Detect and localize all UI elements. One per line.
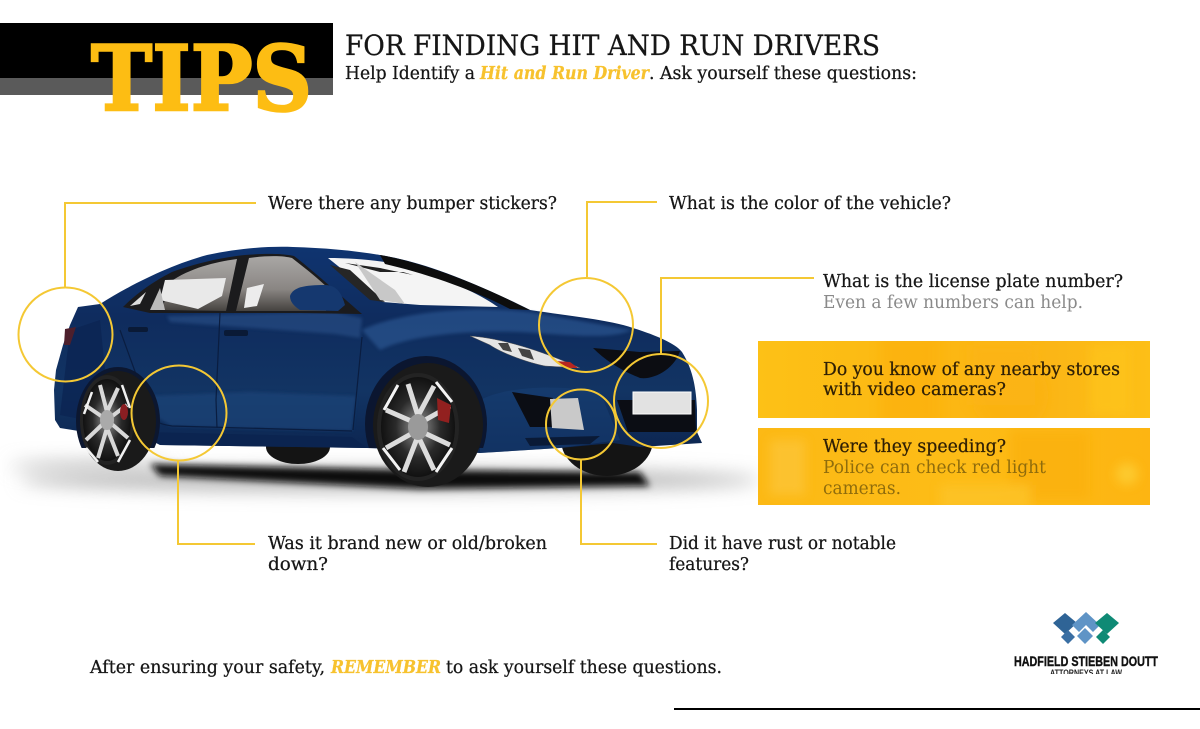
panel: speeding: Police can check red light (823, 458, 1046, 478)
logo mark (1053, 612, 1119, 644)
far wheels (266, 404, 653, 476)
label: vehicle age: down? (268, 555, 328, 575)
panel: video cameras: with video cameras? (823, 380, 1006, 400)
car body (54, 247, 702, 453)
callout: colour (539, 202, 657, 372)
fog lamp (550, 398, 584, 430)
panel: video cameras (758, 341, 1150, 418)
header banner (0, 23, 333, 95)
subheading: Hit and Run Driver (479, 64, 651, 84)
panel: video cameras: Do you know of any nearby stores (823, 360, 1120, 380)
windshield (328, 255, 530, 310)
panel: speeding: Were they speeding? (823, 437, 1006, 457)
label: licence plate: What is the license plate number? (823, 272, 1123, 292)
footer reminder: REMEMBER (330, 658, 441, 678)
headlight (470, 336, 580, 368)
bumper intake (512, 392, 553, 427)
lower grille (617, 400, 696, 432)
subheading: . Ask yourself these questions: (649, 64, 917, 84)
label: rust: features? (669, 555, 749, 575)
subheading (345, 64, 917, 84)
title: TIPS: TIPS (91, 26, 312, 132)
label: licence plate: Even a few numbers can help. (823, 293, 1083, 313)
footer reminder: to ask yourself these questions. (446, 658, 722, 678)
callout: vehicle age (132, 366, 255, 544)
callout: rust (546, 390, 657, 544)
license plate (633, 392, 691, 414)
label: vehicle age (268, 534, 547, 575)
label: colour: What is the color of the vehicle? (669, 194, 951, 214)
subheading: Help Identify a (345, 64, 475, 84)
ground shadow (10, 461, 760, 491)
front wheel (365, 356, 487, 492)
logo: Hadfield Stieben Doutt (1014, 612, 1158, 678)
car illustration (54, 247, 702, 492)
headlight accent (555, 361, 578, 368)
label: vehicle age: Was it brand new or old/broken (268, 534, 547, 554)
panel: speeding: cameras. (823, 479, 901, 499)
door handles (128, 327, 248, 336)
panel: speeding (758, 428, 1150, 510)
heading: FOR FINDING HIT AND RUN DRIVERS (345, 29, 880, 62)
label: licence plate (823, 272, 1123, 313)
body shading and panels (60, 309, 632, 453)
callout: licence plate (614, 278, 814, 448)
bumper slit (525, 436, 600, 446)
side mirror (290, 285, 345, 311)
upper grille (593, 348, 680, 378)
logo name: HADFIELD STIEBEN DOUTT (1014, 653, 1158, 669)
footer reminder (89, 658, 722, 678)
footer reminder: After ensuring your safety, (89, 658, 325, 678)
label: rust: Did it have rust or notable (669, 534, 896, 554)
rear light (64, 327, 76, 345)
side windows (123, 254, 362, 314)
rear wheel (76, 367, 160, 475)
label: rust (669, 534, 896, 575)
callout: bumper stickers (18, 203, 256, 382)
label: bumper stickers: Were there any bumper stickers? (268, 194, 557, 214)
